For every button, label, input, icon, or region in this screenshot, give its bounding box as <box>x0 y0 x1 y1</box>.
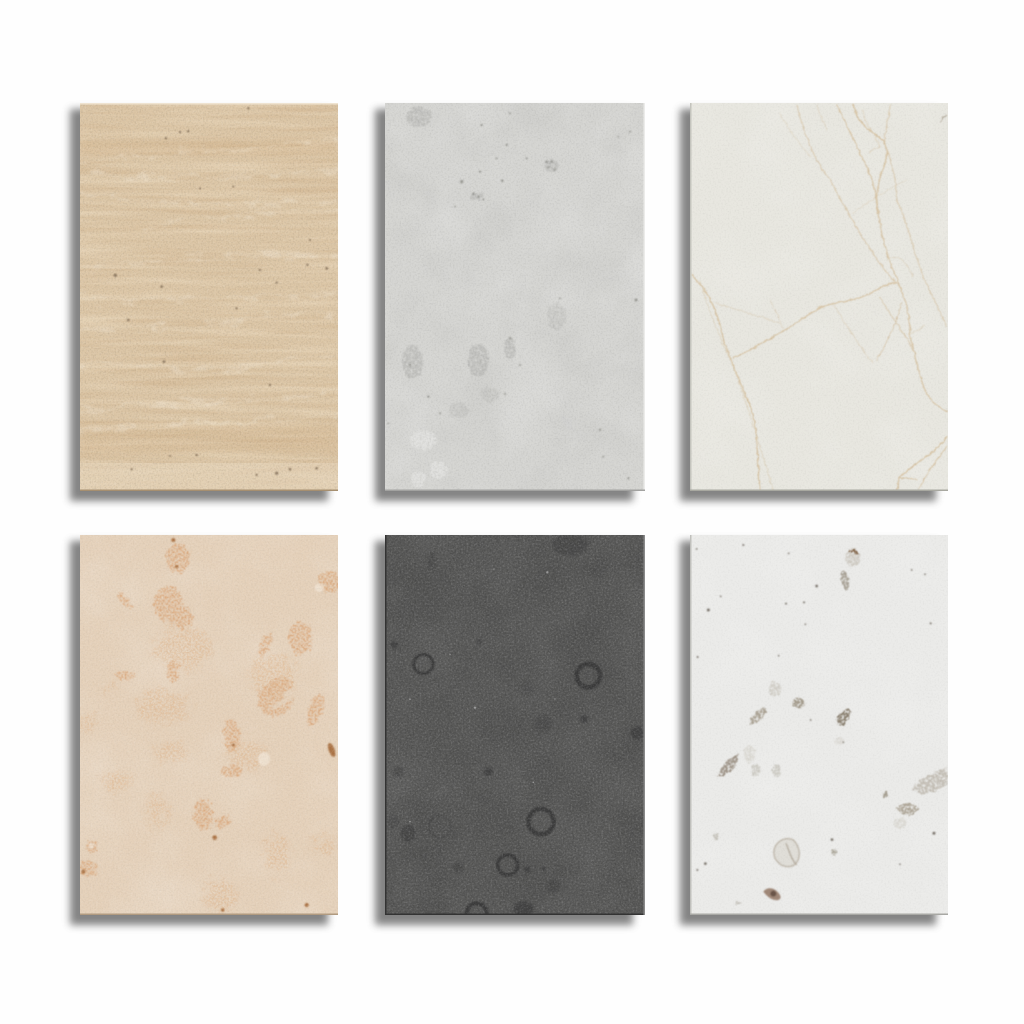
stone inclusions <box>713 548 948 905</box>
gold veins <box>692 105 947 490</box>
faint patches <box>78 628 337 912</box>
tile: white terrazzo with inclusions <box>680 535 948 925</box>
dark spots <box>387 534 644 916</box>
small specks <box>696 544 935 871</box>
peach mineral patches <box>80 544 341 876</box>
tile: cream marble with gold veins <box>680 103 948 501</box>
large clear inclusion <box>763 839 799 900</box>
stone sample board <box>64 103 948 931</box>
tile: charcoal stone with rings <box>375 534 645 925</box>
light flecks <box>409 568 556 822</box>
tile: peach limestone <box>70 535 341 925</box>
dark rings <box>414 654 600 923</box>
tile: pale grey limestone <box>375 103 645 501</box>
tile: beige travertine <box>70 103 347 501</box>
